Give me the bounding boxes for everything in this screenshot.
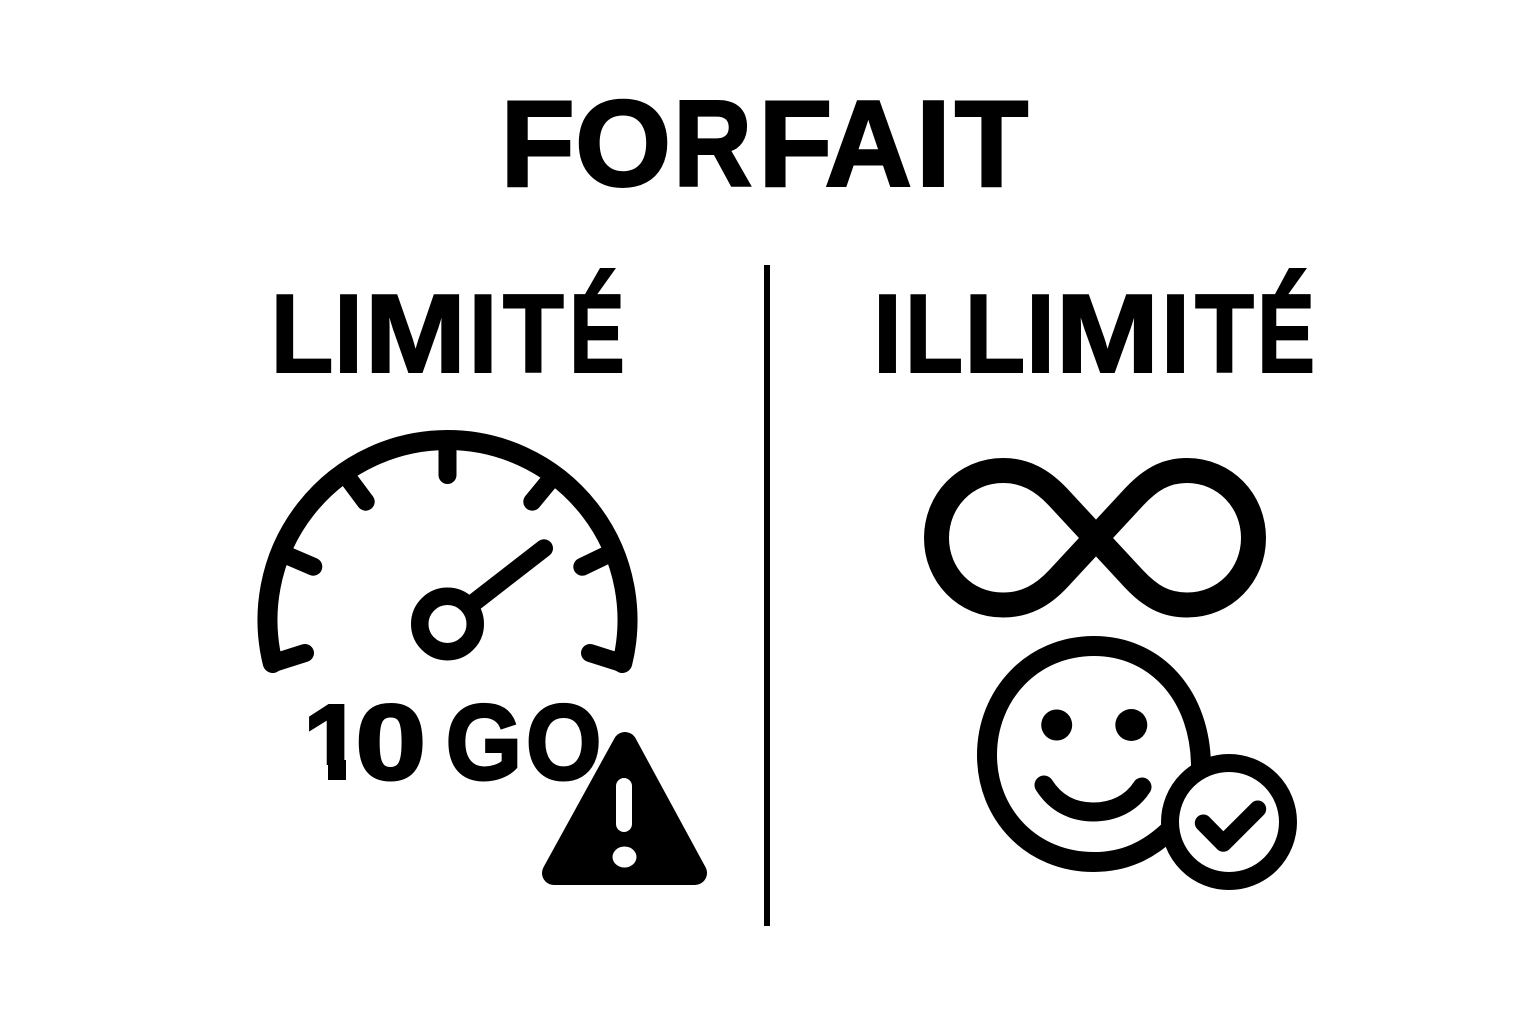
title: R [674, 76, 752, 212]
icon: warning triangle [554, 744, 695, 873]
icon: speedometer gauge [268, 440, 628, 663]
data amount label [303, 682, 601, 802]
smile [1044, 785, 1142, 812]
data amount label: 0 [356, 682, 426, 802]
heading: illimité: L [965, 272, 1025, 396]
heading: limité [270, 262, 626, 396]
title: F [759, 76, 832, 212]
heading: illimité: I [1026, 272, 1055, 396]
heading: limité: I [468, 272, 498, 396]
data amount label: O [526, 682, 601, 802]
icon: smiley face with check badge [987, 646, 1288, 881]
heading: illimité: É [1257, 272, 1315, 396]
title: T [955, 76, 1028, 212]
heading: illimité [873, 262, 1316, 396]
left eye [1041, 710, 1072, 740]
data amount label: G [446, 682, 522, 802]
heading: illimité: I [873, 272, 902, 396]
heading: illimité: M [1056, 272, 1159, 396]
heading: limité: I [334, 272, 363, 396]
check badge circle [1170, 763, 1288, 881]
icon: infinity symbol [936, 470, 1254, 605]
heading: limité: É [569, 272, 625, 396]
vertical divider [764, 265, 770, 926]
heading: limité: M [365, 272, 466, 396]
check mark [1203, 809, 1258, 843]
title: O [575, 76, 671, 212]
title: F [501, 76, 574, 212]
heading: illimité: I [1161, 272, 1190, 396]
title: A [825, 76, 912, 212]
heading: limité: L [270, 272, 333, 396]
title: I [916, 76, 951, 212]
heading: limité: T [503, 272, 564, 396]
data amount label: 1 [303, 682, 363, 802]
face outline [987, 646, 1201, 862]
heading: illimité: T [1195, 272, 1254, 396]
right eye [1115, 709, 1147, 741]
heading: illimité: L [905, 272, 963, 396]
